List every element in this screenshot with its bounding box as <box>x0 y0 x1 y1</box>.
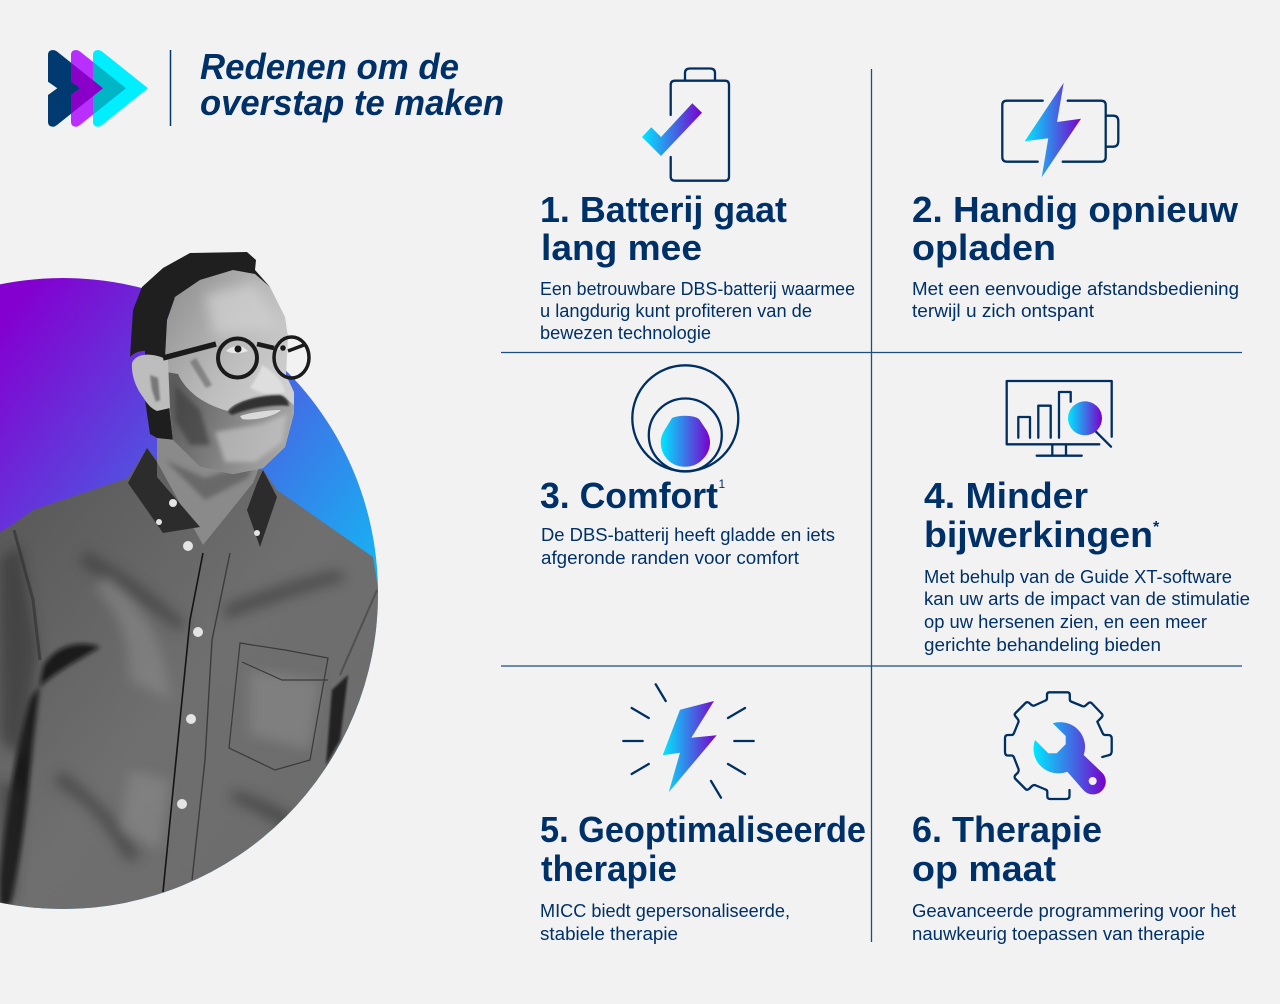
title <box>200 46 504 123</box>
beard <box>166 372 294 474</box>
gradient circle behind portrait <box>0 278 378 909</box>
heading: 2. Handig opnieuw <box>912 189 1239 230</box>
title: overstap te maken <box>200 82 504 123</box>
eyes <box>226 345 290 353</box>
description <box>912 901 1236 944</box>
logo divider <box>170 50 172 126</box>
heading: lang mee <box>541 227 702 268</box>
logo: three overlapping arrows <box>48 50 148 127</box>
heading <box>540 189 787 268</box>
description: MICC biedt gepersonaliseerde, <box>540 901 790 921</box>
heading: 1. Batterij gaat <box>540 189 787 230</box>
forehead highlight <box>205 283 280 335</box>
description: gerichte behandeling bieden <box>924 635 1161 655</box>
description: kan uw arts de impact van de stimulatie <box>924 589 1250 609</box>
heading: 1 <box>718 477 726 491</box>
icon: battery with check <box>642 68 729 181</box>
panel 3: comfort <box>540 365 835 568</box>
icon: gear with wrench <box>1005 692 1112 799</box>
description: stabiele therapie <box>540 924 678 944</box>
heading: * <box>1153 519 1160 536</box>
description: terwijl u zich ontspant <box>912 301 1094 321</box>
heading <box>912 189 1239 268</box>
description: Met een eenvoudige afstandsbediening <box>912 279 1239 299</box>
description: u langdurig kunt profiteren van de <box>540 301 812 321</box>
description: afgeronde randen voor comfort <box>541 548 799 568</box>
description <box>924 567 1250 655</box>
description <box>912 279 1239 321</box>
description: De DBS-batterij heeft gladde en iets <box>541 525 835 545</box>
hair <box>130 252 270 358</box>
heading: bijwerkingen <box>924 514 1153 555</box>
description: Met behulp van de Guide XT-software <box>924 567 1232 587</box>
glasses <box>163 337 309 378</box>
description: nauwkeurig toepassen van therapie <box>912 924 1205 944</box>
heading <box>912 809 1102 889</box>
heading: op maat <box>912 848 1056 889</box>
description: bewezen technologie <box>540 323 711 343</box>
grid dividers <box>501 69 1242 942</box>
heading: 3. Comfort <box>540 475 718 516</box>
description <box>540 279 855 343</box>
shirt buttons <box>156 499 260 809</box>
heading: 6. Therapie <box>912 809 1102 850</box>
shirt <box>0 448 380 920</box>
face <box>163 270 294 474</box>
icon: concentric circles <box>632 365 738 472</box>
description: Geavanceerde programmering voor het <box>912 901 1236 921</box>
panel 2: easy recharging <box>912 83 1239 321</box>
panel 6: tailored therapy <box>912 692 1236 944</box>
heading <box>540 809 866 889</box>
ear <box>132 355 170 411</box>
icon: monitor with chart and magnifier <box>1007 381 1112 456</box>
description: Een betrouwbare DBS-batterij waarmee <box>540 279 855 299</box>
description <box>540 901 790 944</box>
icon: radiating lightning bolt <box>623 684 754 798</box>
heading <box>924 475 1160 555</box>
description: op uw hersenen zien, en een meer <box>924 612 1207 632</box>
heading: therapie <box>541 848 677 889</box>
panel 4: fewer side effects <box>924 381 1250 655</box>
neck <box>157 438 258 545</box>
panel 5: optimised therapy <box>540 684 866 944</box>
heading: 5. Geoptimaliseerde <box>540 809 866 850</box>
icon: battery with lightning bolt <box>1002 83 1118 177</box>
heading: 4. Minder <box>924 475 1088 516</box>
title: Redenen om de <box>200 46 459 87</box>
nose and mouth <box>190 358 289 420</box>
hair behind ear <box>145 350 176 440</box>
description <box>541 525 835 568</box>
heading: opladen <box>912 227 1056 268</box>
collar <box>128 448 277 547</box>
portrait: man with glasses <box>0 252 380 920</box>
panel 1: battery lasts long <box>540 68 855 343</box>
